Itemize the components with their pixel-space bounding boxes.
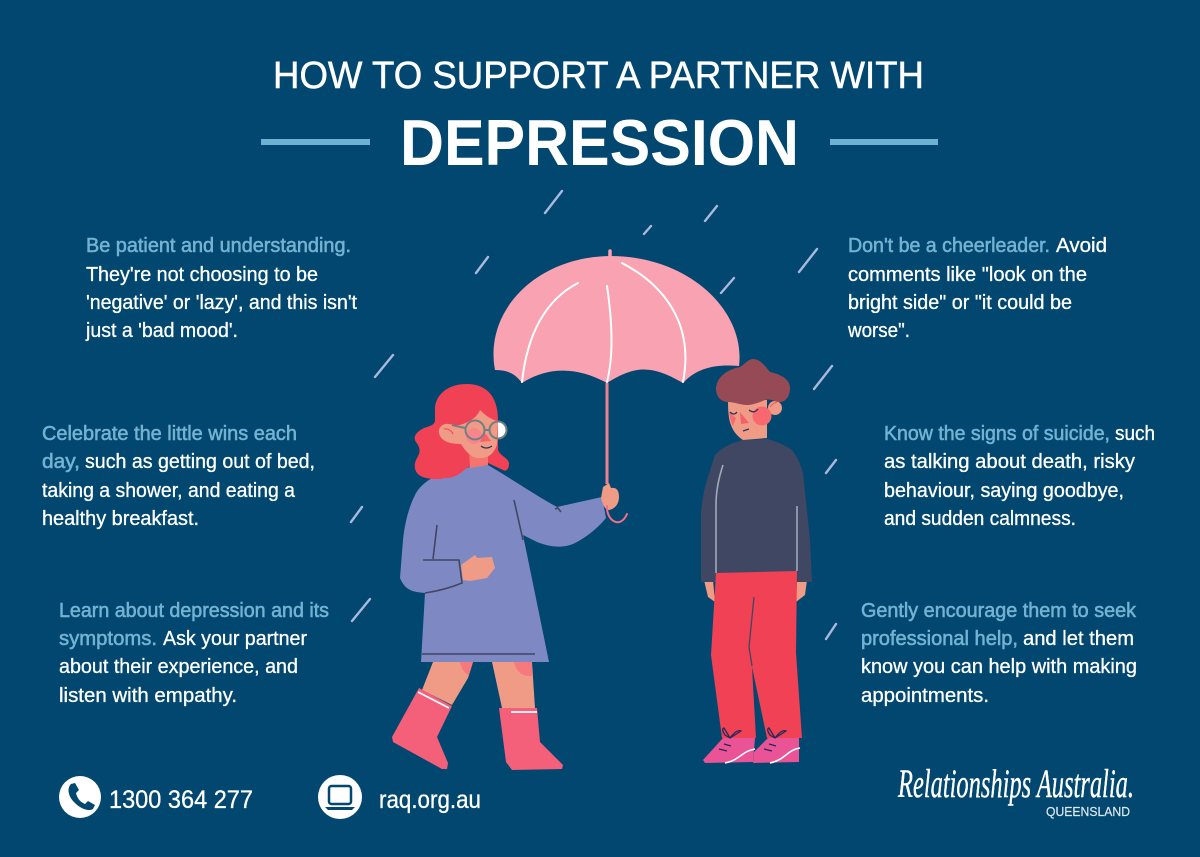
title: HOW TO SUPPORT A PARTNER WITH <box>273 55 924 97</box>
tip: celebrate little wins <box>42 423 315 530</box>
hair <box>415 384 509 479</box>
dress lines <box>422 500 561 654</box>
tip: cheerleader: Don't be a cheerleader. <box>848 235 1050 257</box>
umbrella hook <box>607 506 627 522</box>
umbrella <box>494 251 740 484</box>
tip: be patient: They're not choosing to be <box>86 264 318 286</box>
tip: celebrate little wins: taking a shower, and eating a <box>42 480 296 502</box>
tip: signs of suicide <box>884 423 1155 530</box>
dress <box>400 465 606 662</box>
tip: professional help: and let them <box>1023 628 1134 650</box>
tip: cheerleader: comments like "look on the <box>848 264 1087 286</box>
face <box>439 410 498 458</box>
tip: cheerleader: worse". <box>847 320 910 342</box>
tip: learn about depression: Ask your partner <box>163 628 307 650</box>
tip: learn about depression: symptoms. <box>59 628 157 650</box>
icon: laptop <box>318 775 362 819</box>
laces <box>719 728 786 751</box>
hair <box>716 359 790 405</box>
neck <box>469 450 488 468</box>
sweater <box>701 439 812 582</box>
tip: learn about depression: about their experience, and <box>59 656 298 678</box>
rain <box>351 191 836 639</box>
logo <box>897 761 1134 819</box>
tip: celebrate little wins: day, <box>42 451 80 473</box>
tip: celebrate little wins: Celebrate the little wins each <box>42 423 297 445</box>
phone contact <box>59 776 253 818</box>
glasses <box>498 421 507 439</box>
logo: QUEENSLAND <box>1046 804 1130 819</box>
tip: professional help <box>861 600 1137 707</box>
tip: signs of suicide: behaviour, saying goodbye, <box>884 480 1124 502</box>
hands <box>704 580 715 602</box>
boots <box>392 688 452 769</box>
tip: signs of suicide: as talking about death, risky <box>884 451 1135 473</box>
tip: cheerleader: Avoid <box>1056 235 1107 257</box>
man <box>701 359 812 763</box>
tip: be patient <box>85 235 357 342</box>
tip: professional help: professional help, <box>861 628 1018 650</box>
tip: celebrate little wins: healthy breakfast. <box>42 508 199 530</box>
title <box>261 55 938 179</box>
legs <box>422 662 473 705</box>
tip: learn about depression: listen with empathy. <box>59 685 237 707</box>
shoes <box>703 738 755 763</box>
tip: be patient: 'negative' or 'lazy', and this isn't <box>86 292 357 314</box>
tip: professional help: Gently encourage them to seek <box>861 600 1137 622</box>
tip: be patient: just a 'bad mood'. <box>85 320 238 342</box>
website contact: raq.org.au <box>379 786 481 814</box>
tip: signs of suicide: Know the signs of suicide, <box>884 423 1110 445</box>
website contact <box>318 775 481 819</box>
tip: learn about depression: Learn about depression and its <box>59 600 329 622</box>
tip: signs of suicide: such <box>1115 423 1155 445</box>
hands <box>461 555 495 581</box>
neck and face <box>768 401 782 415</box>
icon: phone <box>59 776 101 818</box>
phone contact: 1300 364 277 <box>109 786 253 814</box>
tip: be patient: Be patient and understanding. <box>86 235 351 257</box>
tip: celebrate little wins: such as getting out of bed, <box>85 451 315 473</box>
pants <box>711 571 802 738</box>
tip: learn about depression <box>59 600 329 707</box>
cheek <box>466 428 482 444</box>
tip: professional help: know you can help with making <box>861 656 1137 678</box>
tip: cheerleader: bright side" or "it could be <box>848 292 1072 314</box>
tip: signs of suicide: and sudden calmness. <box>884 508 1076 530</box>
tip: professional help: appointments. <box>861 685 989 707</box>
woman <box>392 384 627 770</box>
title: DEPRESSION <box>400 106 799 179</box>
tip: cheerleader <box>847 235 1107 342</box>
